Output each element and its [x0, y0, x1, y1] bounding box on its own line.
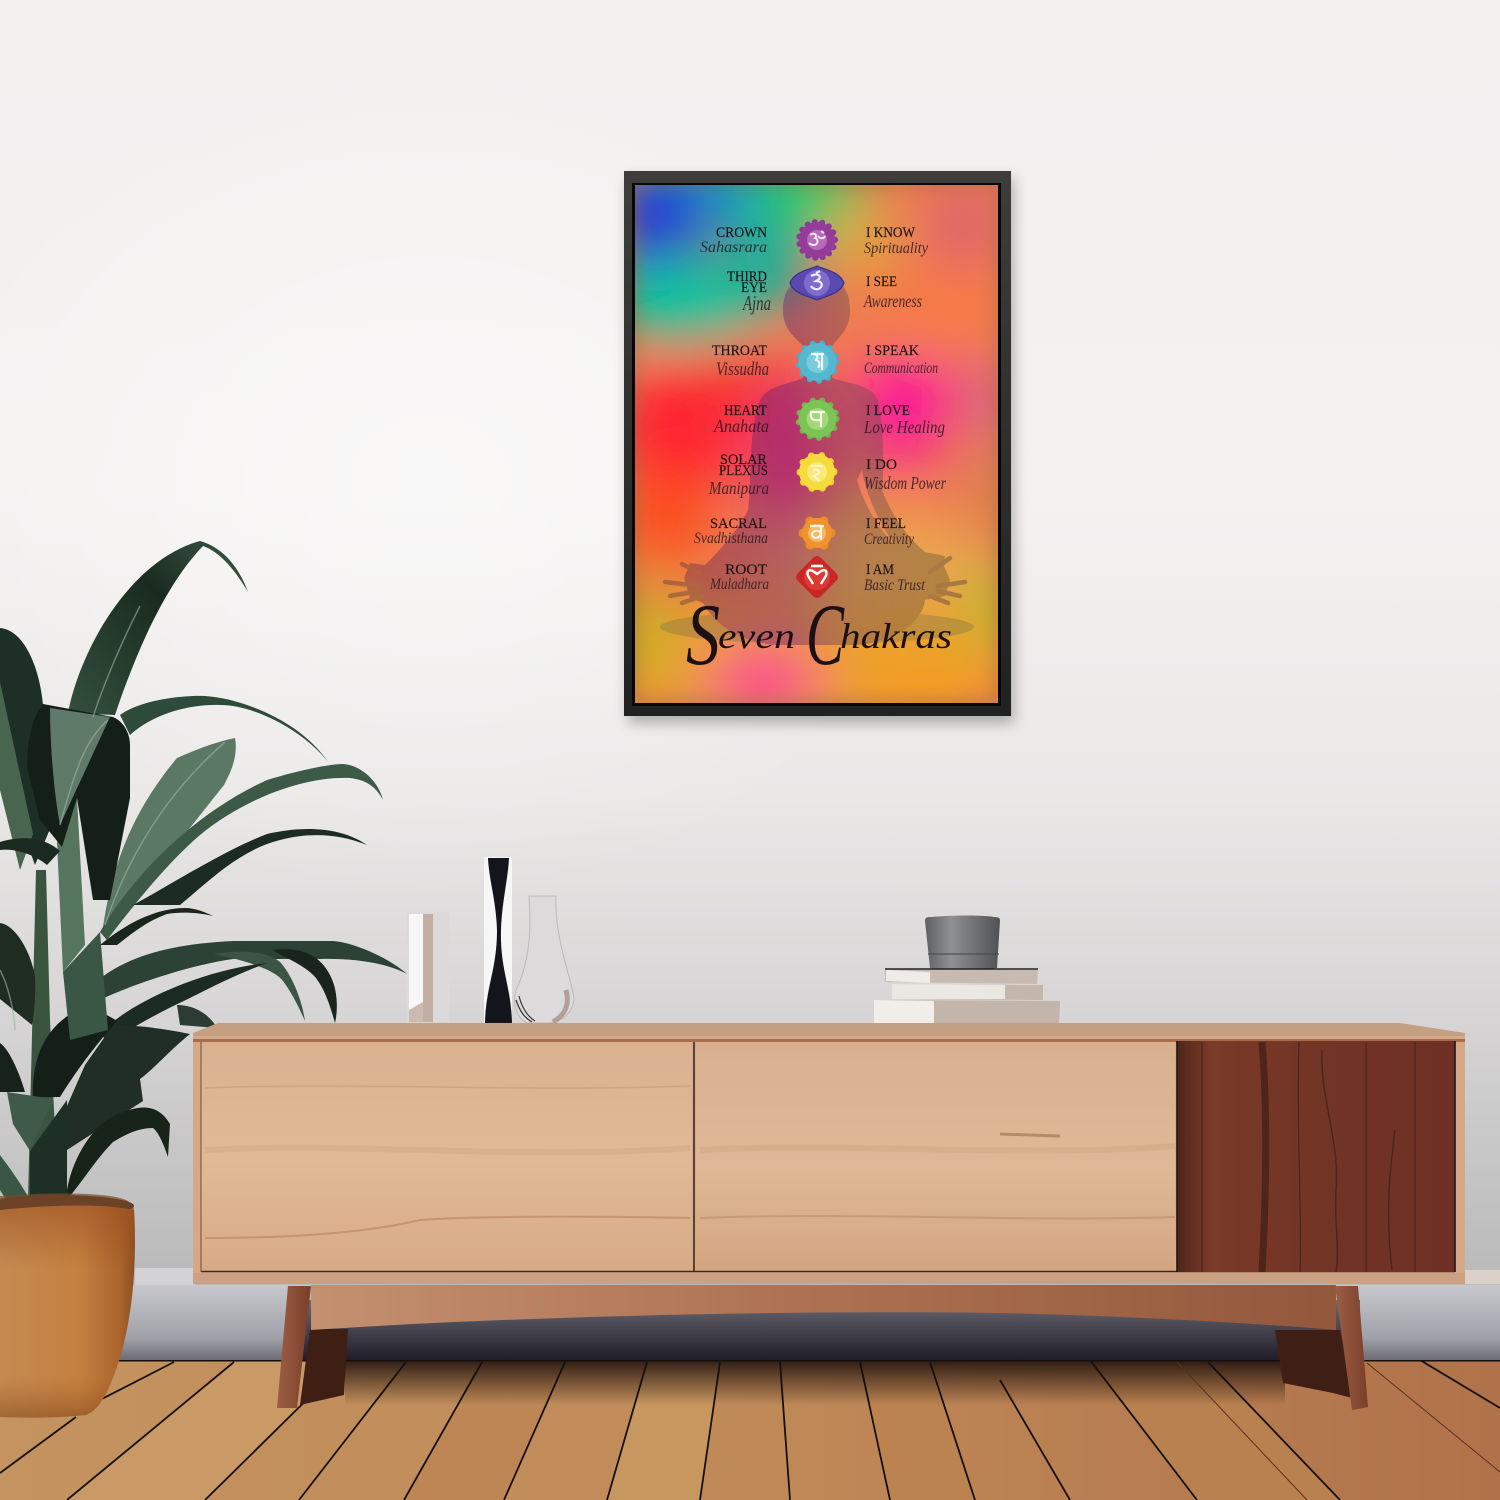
label: I Speak Communication — [864, 343, 938, 377]
icon: throat chakra — [798, 343, 836, 381]
label: I Feel Creativity — [864, 516, 915, 548]
frame shadow — [628, 178, 1014, 723]
icon: crown chakra — [799, 222, 835, 258]
left drawer — [201, 1042, 692, 1271]
title: Seven Chakras: even — [718, 616, 795, 656]
decor: stacked books and grey cup — [874, 916, 1060, 1028]
label: Crown Sahasrara — [700, 225, 767, 256]
label: I Love Love Healing — [863, 403, 945, 437]
plant leaves — [0, 541, 407, 1206]
wooden sideboard — [193, 1023, 1465, 1410]
decor: vases — [407, 857, 574, 1023]
icon: heart chakra — [798, 400, 836, 438]
label: Solar Plexus Manipura: SOLAR — [720, 452, 767, 468]
sideboard rear legs — [300, 1329, 1352, 1405]
framed poster: Seven Chakras — [620, 170, 1022, 731]
label: I Feel Creativity: I FEEL — [866, 516, 906, 532]
label: Crown Sahasrara: CROWN — [716, 225, 767, 241]
label: I See Awareness — [863, 274, 922, 311]
label: Heart Anahata: HEART — [724, 403, 767, 419]
label: Root Muladhara — [709, 562, 769, 593]
right drawer — [696, 1042, 1175, 1271]
label: I See Awareness: Awareness — [863, 291, 922, 311]
title: Seven Chakras: S — [686, 587, 720, 684]
label: Sacral Svadhisthana: Svadhisthana — [694, 530, 768, 547]
book stack — [874, 969, 1060, 1028]
grey cup — [925, 916, 1000, 970]
label: Solar Plexus Manipura — [708, 452, 769, 498]
dark wood door — [1177, 1041, 1455, 1272]
label: I Speak Communication: Communication — [864, 360, 938, 377]
label: Root Muladhara: Muladhara — [709, 576, 769, 593]
black frame — [624, 171, 1011, 716]
black and white vase — [484, 857, 512, 1023]
label: Root Muladhara: ROOT — [725, 562, 767, 578]
icon: solar plexus chakra — [799, 454, 835, 490]
label: I Am Basic Trust: I AM — [866, 562, 894, 578]
right column affirmations — [863, 225, 947, 594]
left column labels — [694, 225, 771, 593]
label: I Love Love Healing: Love Healing — [863, 417, 945, 437]
icon: third eye chakra — [790, 266, 844, 300]
sideboard top — [193, 1023, 1465, 1041]
label: I Do Wisdom Power — [864, 457, 947, 493]
label: Crown Sahasrara: Sahasrara — [700, 239, 767, 256]
label: Heart Anahata — [713, 403, 769, 436]
sideboard carcass — [193, 1036, 1465, 1284]
label: Throat Vissudha — [712, 343, 769, 380]
label: I Feel Creativity: Creativity — [864, 531, 915, 548]
glass block vase — [407, 912, 449, 1022]
label: I Am Basic Trust: Basic Trust — [864, 577, 925, 594]
label: Sacral Svadhisthana — [694, 516, 768, 547]
label: Third Eye Ajna — [727, 269, 771, 315]
baseboard — [0, 1268, 1500, 1361]
meditating silhouette — [660, 278, 974, 645]
lower rail — [311, 1285, 1336, 1330]
label: Heart Anahata: Anahata — [713, 416, 769, 436]
label: Throat Vissudha: THROAT — [712, 343, 767, 359]
label: I Know Spirituality: Spirituality — [864, 240, 929, 257]
label: Sacral Svadhisthana: SACRAL — [710, 516, 767, 532]
clear glass carafe — [515, 896, 574, 1023]
label: Throat Vissudha: Vissudha — [716, 359, 769, 380]
label: Solar Plexus Manipura: PLEXUS — [719, 463, 768, 479]
label: I Know Spirituality — [864, 225, 929, 257]
icon: sacral chakra — [802, 518, 832, 548]
label: I Know Spirituality: I KNOW — [866, 225, 916, 241]
wooden floor — [0, 1360, 1500, 1500]
label: Third Eye Ajna: THIRD — [727, 269, 767, 285]
label: Third Eye Ajna: EYE — [741, 280, 767, 296]
label: I Am Basic Trust — [864, 562, 925, 594]
title: Seven Chakras: C — [806, 587, 845, 684]
sideboard front legs — [277, 1286, 1368, 1410]
label: Solar Plexus Manipura: Manipura — [708, 478, 769, 498]
label: Third Eye Ajna: Ajna — [742, 291, 771, 315]
label: I Speak Communication: I SPEAK — [866, 343, 919, 359]
label: I Love Love Healing: I LOVE — [866, 403, 910, 419]
icon: root chakra — [801, 561, 833, 593]
label: I Do Wisdom Power: Wisdom Power — [864, 473, 947, 493]
plant in terracotta pot — [0, 541, 407, 1418]
colour field artwork — [635, 185, 998, 703]
label: I Do Wisdom Power: I DO — [866, 457, 897, 473]
title: Seven Chakras: hakras — [840, 616, 952, 656]
label: I See Awareness: I SEE — [866, 274, 897, 290]
terracotta pot — [0, 1193, 135, 1418]
